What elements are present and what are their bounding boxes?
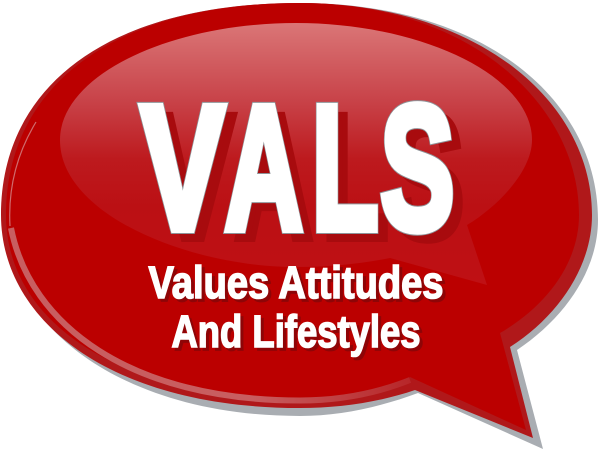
subtitle line 2: And Lifestyles (172, 306, 420, 357)
title grey outline (141, 69, 454, 267)
subtitle line 1: Values Attitudes (148, 257, 444, 308)
title shadow (151, 78, 464, 276)
title shadow: S (391, 79, 464, 276)
title white face: V (141, 71, 224, 267)
lower-left rim highlight (11, 228, 410, 400)
title shadow: V (151, 80, 234, 276)
title grey outline: S (381, 70, 454, 267)
subtitle (148, 257, 446, 360)
title shadow: L (322, 79, 388, 275)
title grey outline: V (141, 71, 224, 267)
title grey outline: L (312, 70, 378, 266)
title white face (141, 69, 454, 267)
glossy highlight (60, 23, 532, 285)
title grey outline: A (225, 69, 303, 266)
subtitle line 2 shadow: And Lifestyles (174, 309, 424, 360)
title white face: S (381, 70, 454, 267)
left rim thin highlight (10, 122, 36, 226)
subtitle line 1 shadow: Values Attitudes (152, 260, 446, 311)
title white face: A (225, 69, 303, 266)
title white face: L (312, 70, 378, 266)
title shadow: A (235, 78, 313, 275)
title: VALS (141, 69, 464, 276)
